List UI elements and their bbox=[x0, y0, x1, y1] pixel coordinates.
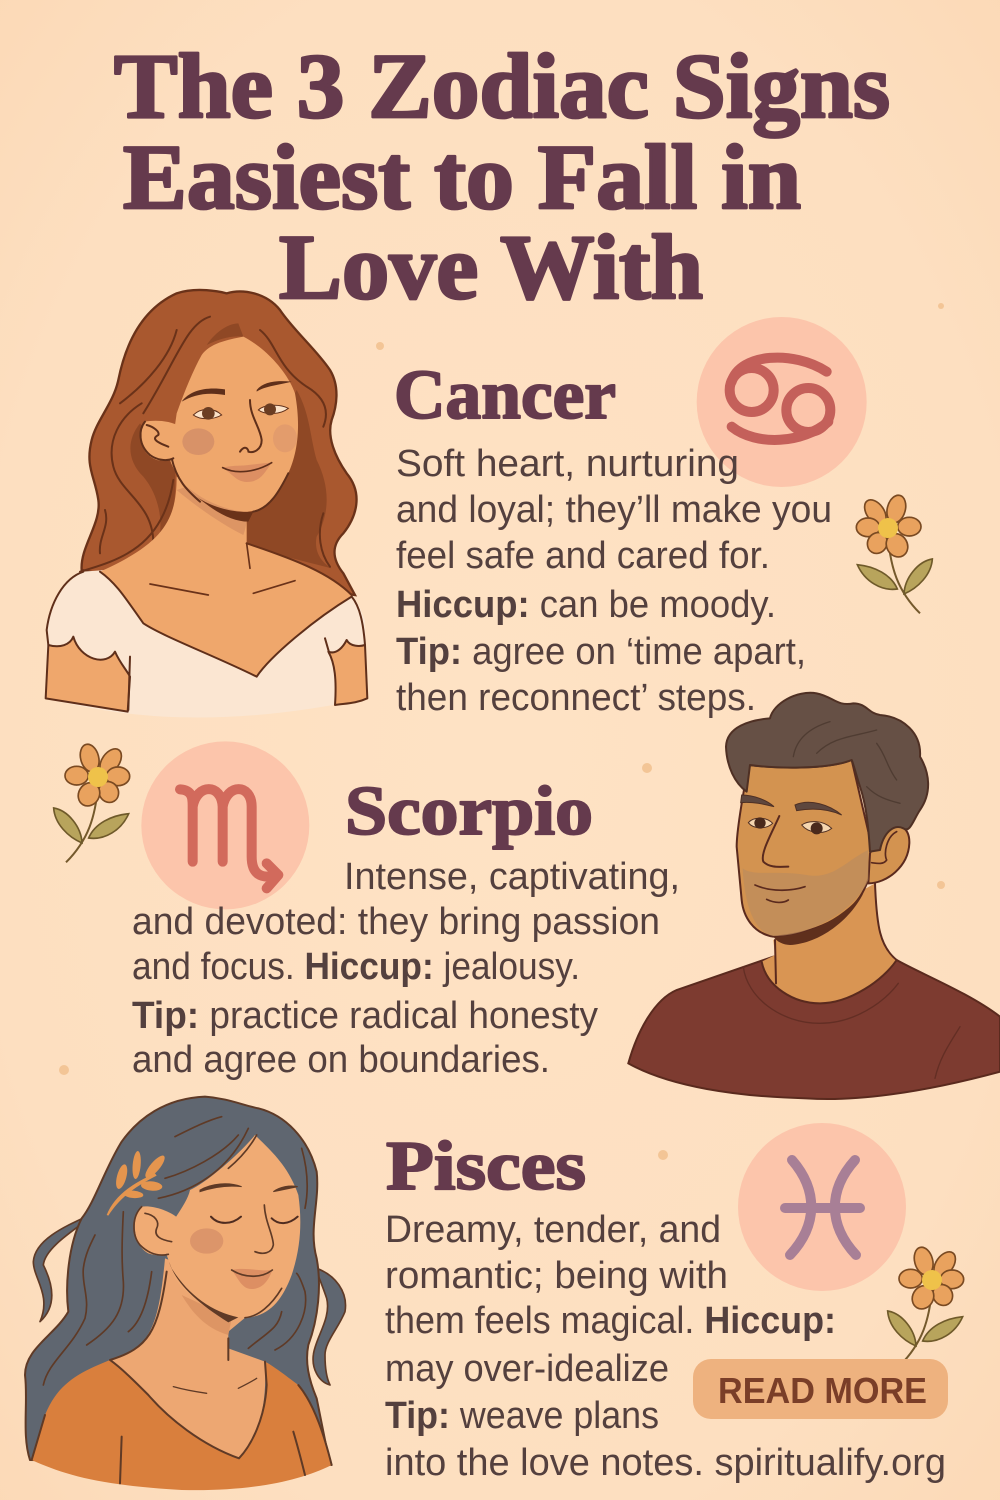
heading: Cancer: Cancer bbox=[394, 357, 616, 434]
text block: Pisces bbox=[385, 1209, 946, 1484]
text block: Pisces: into the love notes. spiritualify.org bbox=[385, 1442, 946, 1484]
portrait: Scorpio man bbox=[628, 693, 1000, 1099]
text block: Cancer: and loyal; they’ll make you bbox=[396, 489, 832, 531]
icon: flower top right bbox=[856, 493, 932, 613]
text block: Cancer: Hiccup: can be moody. bbox=[396, 584, 776, 626]
zodiac badge: Scorpio bbox=[141, 741, 309, 909]
title: Easiest to Fall in bbox=[123, 126, 801, 228]
text block: Pisces: romantic; being with bbox=[385, 1255, 728, 1297]
button: read more bbox=[693, 1359, 948, 1419]
zodiac badge: Pisces bbox=[738, 1123, 906, 1291]
text block: Pisces: Dreamy, tender, and bbox=[385, 1209, 721, 1251]
text block: Cancer: Soft heart, nurturing bbox=[396, 443, 739, 485]
heading: Scorpio: Scorpio bbox=[345, 773, 593, 850]
text block: Scorpio: Tip: practice radical honesty bbox=[132, 995, 598, 1037]
icon: flower bottom right bbox=[888, 1245, 964, 1365]
title: Love With bbox=[279, 216, 703, 318]
text block: Scorpio: and devoted: they bring passion bbox=[132, 901, 660, 943]
button: read more: READ MORE bbox=[718, 1370, 927, 1411]
text block: Cancer: then reconnect’ steps. bbox=[396, 677, 756, 719]
text block: Scorpio: and focus. Hiccup: jealousy. bbox=[132, 946, 580, 988]
icon: flower left bbox=[54, 742, 130, 862]
text block: Pisces: Tip: weave plans bbox=[385, 1395, 659, 1437]
text block: Cancer: Tip: agree on ‘time apart, bbox=[396, 631, 806, 673]
text block: Scorpio bbox=[132, 856, 680, 1081]
heading: Pisces: Pisces bbox=[386, 1128, 586, 1205]
portrait: Pisces woman bbox=[25, 1097, 346, 1490]
text block: Scorpio: Intense, captivating, bbox=[344, 856, 680, 898]
portrait: Cancer woman bbox=[46, 290, 367, 718]
text block: Cancer bbox=[396, 443, 832, 719]
text block: Pisces: them feels magical. Hiccup: bbox=[385, 1300, 836, 1342]
title: The 3 Zodiac Signs bbox=[114, 35, 890, 137]
title bbox=[114, 35, 890, 318]
text block: Scorpio: and agree on boundaries. bbox=[132, 1039, 550, 1081]
text block: Cancer: feel safe and cared for. bbox=[396, 535, 770, 577]
text block: Pisces: may over-idealize bbox=[385, 1348, 669, 1390]
zodiac badge: Cancer bbox=[697, 317, 867, 487]
